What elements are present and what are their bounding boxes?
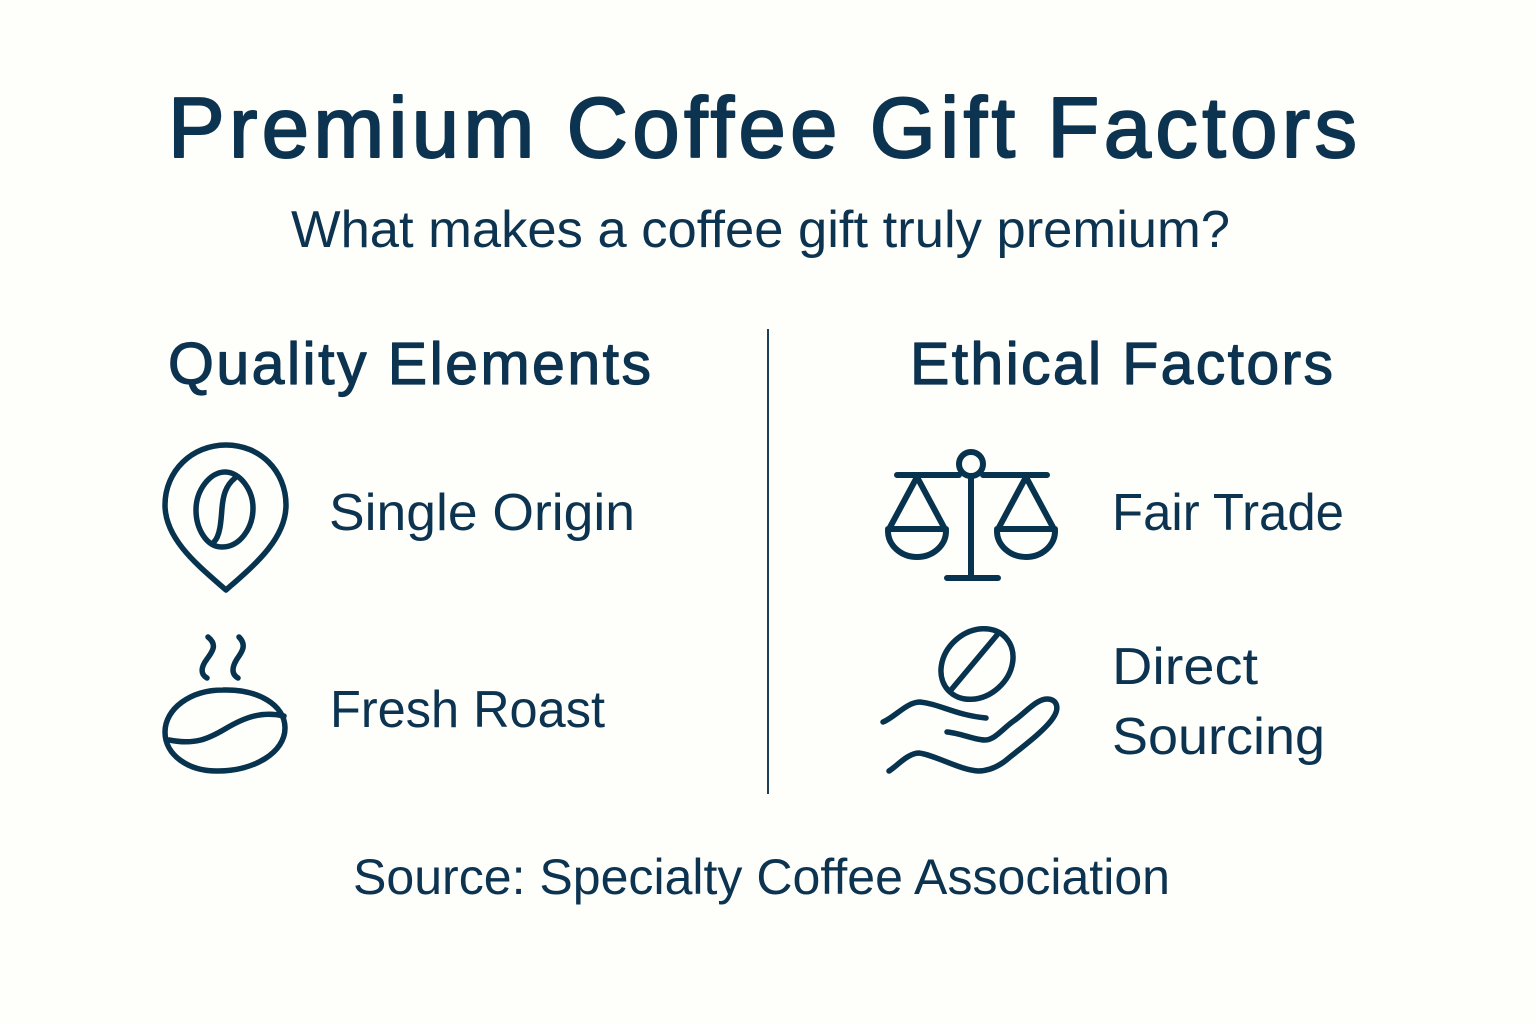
label: direct sourcing: Direct xyxy=(1112,638,1259,696)
label: fair trade: Fair Trade xyxy=(1112,484,1344,542)
source line: Source: Specialty Coffee Association xyxy=(353,849,1170,905)
label: fresh roast: Fresh Roast xyxy=(330,681,606,739)
label: direct sourcing: Sourcing xyxy=(1112,708,1325,766)
panel: ethical factors xyxy=(883,331,1344,771)
icon: balance scales xyxy=(888,452,1055,578)
icon: hand holding bean xyxy=(883,614,1057,771)
subtitle: What makes a coffee gift truly premium? xyxy=(291,201,1230,259)
title: Premium Coffee Gift Factors xyxy=(168,81,1357,176)
heading: quality elements: Quality Elements xyxy=(168,331,651,397)
panel: quality elements xyxy=(165,331,651,771)
label: single origin: Single Origin xyxy=(329,484,635,542)
heading: ethical factors: Ethical Factors xyxy=(910,331,1333,397)
label: direct sourcing xyxy=(1112,638,1325,766)
icon: map pin with coffee bean xyxy=(165,445,286,590)
icon: steaming roasted bean xyxy=(165,637,285,771)
center divider xyxy=(767,329,769,794)
